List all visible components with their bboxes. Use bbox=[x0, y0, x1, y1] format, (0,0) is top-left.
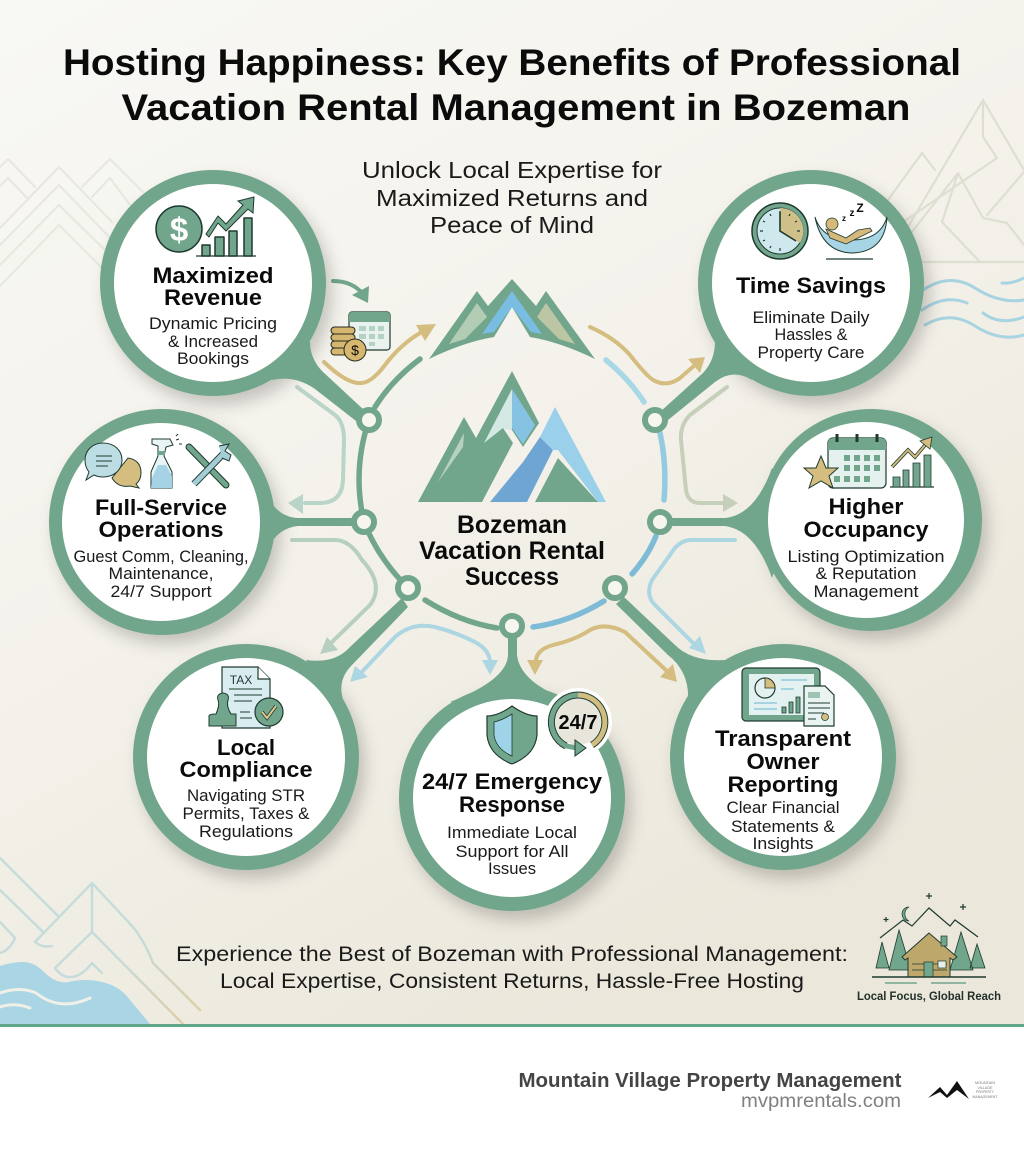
description: & Increased bbox=[168, 332, 258, 351]
description: Listing Optimization bbox=[788, 547, 944, 566]
icon: clock and hammock: z bbox=[842, 214, 846, 223]
closing statement: Experience the Best of Bozeman with Professional Management: bbox=[176, 943, 848, 966]
heading: Local bbox=[217, 735, 275, 760]
decoration: right water waves bbox=[922, 278, 1024, 337]
title: Hosting Happiness: Key Benefits of Professional bbox=[63, 42, 961, 83]
icon: log cabin in mountains bbox=[872, 893, 986, 983]
arrow: sage to higher occupancy bbox=[681, 387, 738, 512]
icon: coins and calendar bbox=[331, 312, 390, 361]
icon: tax document and stamp bbox=[209, 667, 283, 728]
arrow: gold top-right bbox=[590, 327, 705, 383]
arrow: light green to local compliance bbox=[292, 540, 376, 654]
heading bbox=[152, 263, 274, 310]
footer company name bbox=[518, 1070, 902, 1112]
description bbox=[447, 823, 577, 878]
heading: Full-Service bbox=[95, 495, 227, 520]
icon: clock and hammock: z bbox=[850, 208, 854, 219]
description: Hassles & bbox=[774, 325, 848, 344]
heading: 24/7 Emergency bbox=[422, 769, 603, 794]
description: Statements & bbox=[731, 817, 836, 836]
description bbox=[74, 547, 248, 601]
description: Insights bbox=[752, 834, 814, 853]
heading bbox=[804, 494, 929, 542]
arrow: light blue to transparent reporting bbox=[649, 540, 735, 654]
icon: top mountain emblem bbox=[429, 279, 595, 359]
central hub ring bbox=[359, 359, 665, 628]
panel: maximized revenue bbox=[100, 170, 364, 421]
description: Property Care bbox=[758, 343, 864, 362]
footer logo: PROPERTY bbox=[976, 1090, 995, 1094]
central label: Vacation Rental bbox=[419, 537, 605, 565]
heading: Maximized bbox=[152, 263, 274, 288]
icon: shield and 24/7 clock: 24/7 bbox=[559, 712, 597, 734]
icon: dollar and growth chart: $ bbox=[170, 211, 188, 248]
description: & Reputation bbox=[816, 564, 916, 583]
description: Bookings bbox=[177, 349, 249, 368]
title: Vacation Rental Management in Bozeman bbox=[122, 87, 910, 128]
heading: Owner bbox=[746, 749, 820, 774]
icon: star, calendar and chart bbox=[804, 434, 934, 488]
heading: Transparent bbox=[715, 726, 852, 751]
icon: shield and 24/7 clock bbox=[487, 688, 612, 764]
footer company name: Mountain Village Property Management bbox=[518, 1070, 902, 1092]
heading: Revenue bbox=[164, 285, 262, 310]
arrow: small green bbox=[333, 281, 369, 303]
panel: local compliance bbox=[133, 598, 408, 870]
description: 24/7 Support bbox=[110, 582, 212, 601]
heading bbox=[95, 495, 227, 542]
icon: tablet and report bbox=[742, 668, 834, 726]
description: Maintenance, bbox=[108, 564, 214, 583]
description bbox=[182, 786, 310, 841]
description bbox=[788, 547, 944, 601]
subtitle: Unlock Local Expertise for bbox=[362, 157, 662, 183]
description bbox=[726, 798, 840, 853]
decoration: top-right mountain lines bbox=[888, 100, 1024, 262]
central label: Success bbox=[465, 563, 559, 591]
description: Permits, Taxes & bbox=[182, 804, 310, 823]
panel: 24/7 emergency response bbox=[399, 632, 625, 911]
panel: higher occupancy bbox=[668, 409, 982, 631]
icon: dollar and growth chart bbox=[156, 197, 256, 256]
panel: time savings bbox=[660, 170, 924, 420]
heading: Occupancy bbox=[804, 517, 929, 542]
description: Issues bbox=[488, 859, 536, 878]
decoration: top-left mountain lines bbox=[0, 159, 143, 286]
arrow: gold top-left bbox=[324, 324, 436, 383]
heading: Response bbox=[459, 792, 565, 817]
heading: Time Savings bbox=[736, 273, 886, 298]
subtitle bbox=[362, 157, 662, 238]
caption: local focus: Local Focus, Global Reach bbox=[857, 991, 1001, 1003]
description: Immediate Local bbox=[447, 823, 577, 842]
icon: coins and calendar: $ bbox=[351, 342, 359, 358]
heading: Reporting bbox=[728, 772, 838, 797]
arrow: light green to full-service bbox=[288, 387, 344, 514]
arrow: light blue double bbox=[350, 626, 498, 682]
heading: Operations bbox=[98, 517, 224, 542]
central label: Bozeman bbox=[457, 511, 567, 539]
description: Navigating STR bbox=[187, 786, 305, 805]
icon: central mountains bbox=[418, 371, 606, 502]
footer panel bbox=[0, 1027, 1024, 1154]
description: Support for All bbox=[456, 842, 568, 861]
heading bbox=[180, 735, 312, 782]
footer bar bbox=[0, 1024, 1024, 1027]
footer logo: MANAGEMENT bbox=[972, 1095, 998, 1099]
subtitle: Peace of Mind bbox=[430, 212, 594, 238]
central label bbox=[419, 511, 605, 591]
icon: clock and hammock: Z bbox=[856, 201, 864, 215]
icon: chat, spray bottle and tools bbox=[85, 434, 231, 488]
description: Regulations bbox=[199, 822, 293, 841]
description: Clear Financial bbox=[726, 798, 840, 817]
description: Guest Comm, Cleaning, bbox=[74, 547, 248, 566]
title bbox=[63, 42, 961, 128]
description: Dynamic Pricing bbox=[149, 314, 277, 333]
heading bbox=[422, 769, 603, 817]
hub nodes bbox=[354, 410, 670, 636]
subtitle: Maximized Returns and bbox=[376, 185, 648, 211]
footer logo bbox=[928, 1081, 998, 1099]
description: Management bbox=[814, 582, 919, 601]
footer logo: VILLAGE bbox=[978, 1086, 993, 1090]
closing statement: Local Expertise, Consistent Returns, Hassle-Free Hosting bbox=[220, 970, 804, 993]
panel: full-service operations bbox=[49, 409, 356, 635]
decoration: bottom-left mountains and water bbox=[0, 858, 200, 1024]
arrow: gold double bbox=[527, 626, 677, 682]
icon: tax document and stamp: TAX bbox=[230, 673, 252, 687]
heading bbox=[715, 726, 852, 797]
heading: Compliance bbox=[180, 757, 312, 782]
panel: transparent owner reporting bbox=[616, 597, 896, 870]
description bbox=[149, 314, 277, 368]
closing statement bbox=[176, 943, 848, 993]
footer logo: MOUNTAIN bbox=[975, 1081, 996, 1085]
footer company name: mvpmrentals.com bbox=[741, 1091, 901, 1112]
icon: clock and hammock bbox=[752, 201, 887, 259]
description bbox=[752, 308, 870, 362]
description: Eliminate Daily bbox=[752, 308, 870, 327]
heading: Higher bbox=[828, 494, 904, 519]
